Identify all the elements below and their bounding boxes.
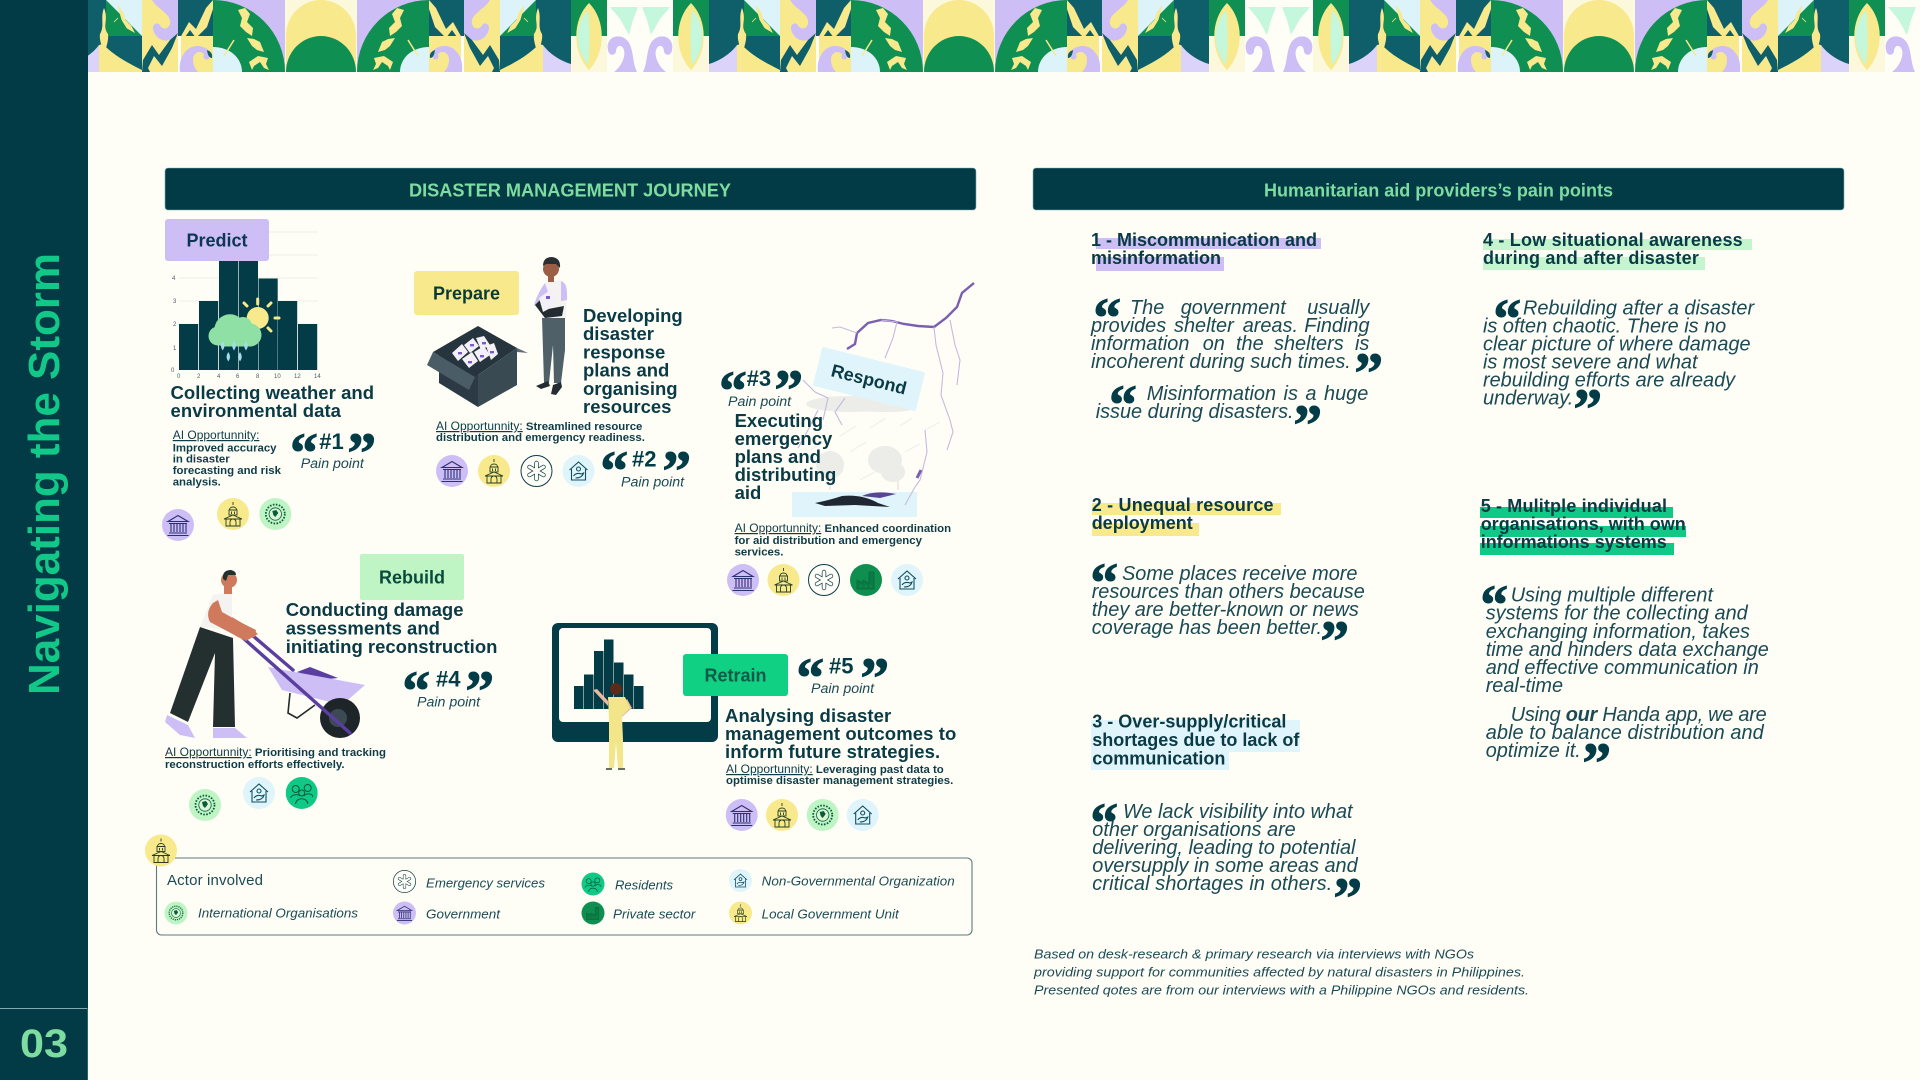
quote 1: on [1203,333,1225,355]
quote 2: ” [1320,609,1349,674]
heading: pain points: Humanitarian aid providers’s pain points [1264,180,1613,200]
actor icons [727,564,923,596]
quote 2: they are better-known or news [1092,599,1359,621]
quote 2: “ [1090,553,1118,615]
bar chart [171,232,321,380]
AI opportunity: services. [735,546,783,558]
quote 1: usually [1307,297,1370,319]
panel: predict [162,219,376,541]
bar chart: 12 [294,374,301,380]
actor icons [162,498,291,541]
footnote: providing support for communities affected by natural disasters in Philippines. [1033,964,1525,980]
pain point 3 [719,358,803,423]
bar chart: 2 [197,374,201,380]
AI opportunity: AI Opportunnity: Enhanced coordination [735,521,951,535]
heading 5: informations systems [1481,532,1667,552]
illustration: open box [427,326,528,407]
quote 1: Finding [1304,315,1370,337]
step title: resources [583,396,671,417]
pain point 2 block [1090,495,1365,674]
quote 3: delivering, leading to potential [1092,837,1356,859]
quote 1: The [1130,297,1164,319]
quote 5: systems for the collecting and [1486,603,1749,625]
stage tag: predict [165,219,269,261]
quote 4 [1483,289,1755,442]
actor icons [189,777,318,821]
quote 3: ” [1333,866,1362,931]
icon: weather [208,299,279,362]
bar chart: 10 [274,374,281,380]
step title: management outcomes to [725,723,956,744]
quote 3: oversupply in some areas and [1092,855,1359,877]
panel: respond [719,283,974,596]
footnote [1033,946,1529,998]
legend: actor involved: Residents [615,878,673,892]
quote 5: “ [1480,575,1508,637]
stage tag: predict: Predict [186,230,248,250]
quote 1: ” [1293,393,1322,458]
pain point 3: ” [774,358,803,423]
bar chart: 3 [173,299,177,305]
panel: rebuild [165,554,497,821]
step title: inform future strategies. [725,741,940,762]
quote 1: areas. [1243,315,1298,337]
quote 4: is often chaotic. There is no [1483,316,1726,338]
stage tag: respond: Respond [829,360,909,399]
AI opportunity: in disaster [173,454,230,466]
pain point 4 [402,659,494,724]
pain point 5: Pain point [811,681,875,697]
quote 5: able to balance distribution and [1486,722,1765,744]
legend: actor involved: International Organisations [198,906,359,920]
heading 1 [1091,230,1321,271]
stage tag: respond [813,347,925,411]
pain point 1 block [1090,230,1383,458]
pain point 2: Pain point [621,475,685,491]
stage tag: prepare: Prepare [433,284,500,304]
sidebar title: Navigating the Storm [20,253,69,695]
heading 4: 4 - Low situational awareness [1483,230,1743,250]
step title: plans and [583,360,669,381]
quote 1: is [1355,333,1369,355]
quote 2: coverage has been better. [1092,617,1322,639]
pain point 1 [290,421,376,486]
pain point 2: ” [662,439,691,504]
quote 1 [1090,288,1383,458]
heading 2: deployment [1092,513,1193,533]
quote 1: “ [1109,375,1137,437]
panel: retrain [552,623,956,831]
quote 2: resources than others because [1092,581,1365,603]
quote 5: time and hinders data exchange [1486,639,1769,661]
quote 1: Misinformation is a huge [1147,383,1368,405]
quote 1: ” [1354,341,1383,406]
step title: Collecting weather and [170,382,374,403]
step title: environmental data [170,400,342,421]
illustration: monitor and analyst [552,623,718,769]
heading: disaster management journey: DISASTER MANAGEMENT JOURNEY [409,180,731,200]
quote 1: provides [1090,315,1166,337]
quote 4: underway. [1483,388,1573,410]
quote 5: real-time [1486,675,1563,697]
quote 5: Using multiple different [1511,585,1714,607]
heading 1: 1 - Miscommunication and [1091,230,1317,250]
legend: actor involved: Local Government Unit [762,906,900,922]
pain point 3: “ [719,361,747,423]
heading 3: 3 - Over-supply/critical [1092,712,1286,732]
heading 2 [1092,495,1281,536]
legend: actor involved: Government [426,906,501,922]
pain point 1: “ [290,423,318,485]
pain point 3: #3 [747,366,771,391]
heading: disaster management journey [165,168,976,210]
bar chart: 1 [173,346,177,352]
AI opportunity: for aid distribution and emergency [735,535,923,547]
heading 4: during and after disaster [1483,248,1699,268]
pain point 2 [600,439,691,504]
legend: actor involved: Actor involved [167,872,263,889]
AI opportunity: AI Opportunnity: [173,428,259,442]
pain point 5: #5 [829,653,853,678]
step title: plans and [735,446,821,467]
step title: assessments and [286,617,440,638]
quote 5: optimize it. [1486,740,1581,762]
pain point 2: “ [600,441,628,503]
pain point 5: “ [796,648,824,710]
bar chart: 6 [236,374,240,380]
quote 1: government [1181,297,1287,319]
step title: response [583,341,665,362]
step title: distributing [735,464,836,485]
quote 3: other organisations are [1092,819,1296,841]
quote 5: Using our Handa app, we are [1511,704,1767,726]
bar chart: 2 [173,322,177,328]
quote 1: issue during disasters. [1096,401,1294,423]
step title: Analysing disaster [725,705,891,726]
quote 1: information [1091,333,1189,355]
illustration: person [534,257,567,395]
quote 5: and effective communication in [1486,657,1759,679]
pain point 4: “ [402,661,430,723]
AI opportunity: optimise disaster management strategies. [726,775,953,787]
pain point 3 block [1090,712,1362,931]
quote 3 [1090,793,1362,931]
heading 4 [1483,230,1752,270]
quote 1: shelter [1174,315,1235,337]
legend: actor involved: Non-Governmental Organization [762,874,955,888]
heading: pain points [1033,168,1844,210]
step title: aid [735,482,761,503]
quote 4: “ [1493,289,1521,351]
quote 3: critical shortages in others. [1092,873,1332,895]
quote 4: Rebuilding after a disaster [1523,298,1755,320]
heading 5: 5 - Mulitple individual [1481,496,1667,516]
AI opportunity: Improved accuracy [173,442,277,454]
bar chart: 4 [172,276,176,282]
decorative pattern banner [2,0,1918,72]
pain point 1: Pain point [301,456,365,472]
quote 4: rebuilding efforts are already [1483,370,1736,392]
heading 5 [1480,496,1686,555]
step title: initiating reconstruction [286,636,497,657]
step title: organising [583,378,678,399]
footnote: Based on desk-research & primary research via interviews with NGOs [1034,946,1475,962]
stage tag: prepare [414,271,519,315]
bar chart: 8 [256,374,260,380]
pain point 4 block [1483,230,1755,442]
illustration: person with wheelbarrow [165,570,365,738]
pain point 2: #2 [632,447,656,472]
left sidebar [0,0,88,1080]
quote 1: “ [1093,288,1121,350]
AI opportunity: AI Opportunnity: Leveraging past data to [726,762,944,776]
pain point 5 block [1480,496,1769,796]
step title: Executing [735,410,823,431]
quote 2: Some places receive more [1122,563,1357,585]
actor icons [436,455,594,487]
pain point 5: ” [860,646,889,711]
quote 5: exchanging information, takes [1486,621,1750,643]
bar chart: 14 [314,374,321,380]
step title: disaster [583,323,654,344]
stage tag: retrain: Retrain [704,666,767,686]
AI opportunity: reconstruction efforts effectively. [165,759,345,771]
AI opportunity: analysis. [173,476,221,488]
step title: Conducting damage [286,599,464,620]
quote 4: ” [1573,377,1602,442]
quote 2 [1090,553,1365,674]
pain point 1: ” [347,421,376,486]
heading 2: 2 - Unequal resource [1092,495,1274,515]
quote 5: ” [1582,731,1611,796]
pain point 4: #4 [436,667,461,692]
pain point 4: Pain point [417,695,481,711]
heading 5: organisations, with own [1481,514,1686,534]
AI opportunity: distribution and emergency readiness. [436,432,645,444]
pain point 5 [796,646,889,711]
quote 4: is most severe and what [1483,352,1699,374]
actor icons [726,799,879,831]
heading 3 [1091,712,1300,770]
pain point 3: Pain point [728,394,792,410]
quote 1: the [1236,333,1264,355]
heading 1: misinformation [1091,248,1221,268]
stage tag: rebuild [360,554,464,600]
quote 3: We lack visibility into what [1123,801,1354,823]
quote 3: “ [1090,793,1118,855]
quote 1: shelters [1274,333,1344,355]
step title: emergency [735,428,833,449]
illustration: storm [790,283,974,517]
bar chart: 0 [177,374,181,380]
legend: actor involved: Emergency services [426,876,545,890]
step title: Developing [583,305,683,326]
page number: 03 [20,1022,68,1066]
panel: prepare [414,257,691,504]
stage tag: retrain [683,654,788,696]
heading 3: communication [1092,748,1225,768]
bar chart: 0 [171,368,175,374]
legend: actor involved: Private sector [613,906,696,922]
pain point 4: ” [465,659,494,724]
quote 1: incoherent during such times. [1091,351,1351,373]
AI opportunity: forecasting and risk [173,465,282,477]
AI opportunity: AI Opportunnity: Prioritising and tracking [165,745,386,759]
stage tag: rebuild: Rebuild [379,568,445,588]
legend: actor involved [145,834,972,935]
quote 4: clear picture of where damage [1483,334,1751,356]
bar chart: 4 [217,374,221,380]
footnote: Presented qotes are from our interviews with a Philippine NGOs and residents. [1034,982,1529,998]
quote 5 [1480,575,1769,796]
AI opportunity: AI Opportunnity: Streamlined resource [436,419,642,433]
heading 3: shortages due to lack of [1092,730,1300,750]
pain point 1: #1 [319,429,344,454]
